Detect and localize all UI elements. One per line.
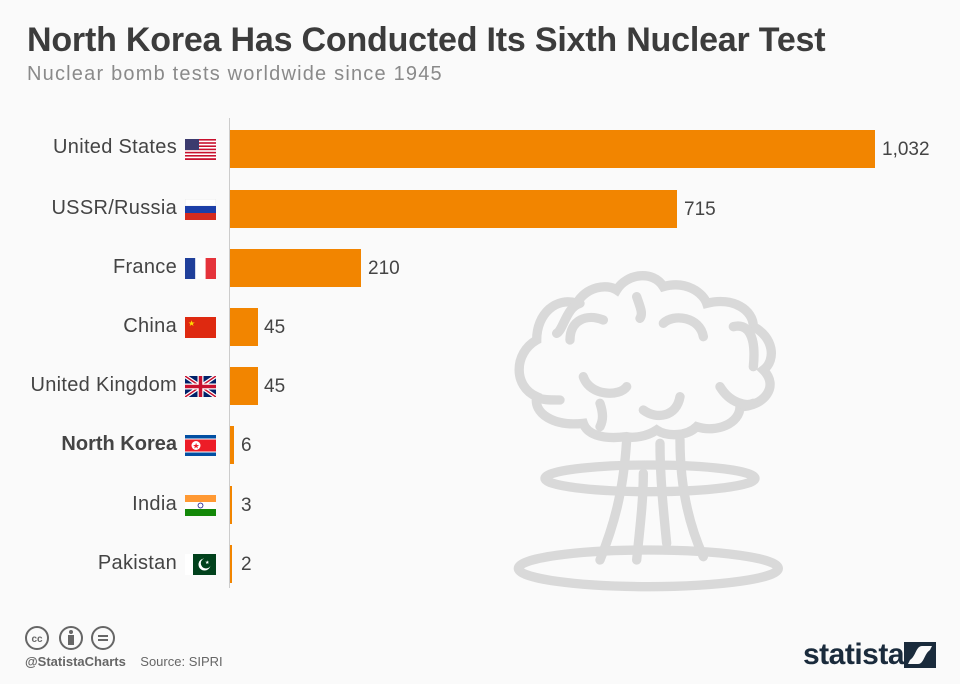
row: India [132, 486, 252, 524]
title: North Korea Has Conducted Its Sixth Nuclear Test [27, 21, 825, 59]
footer: license icons: cc [31, 634, 43, 645]
text: North Korea [61, 433, 177, 455]
text: 45 [264, 376, 285, 397]
row: USSR/Russia [51, 190, 716, 228]
text: United Kingdom [30, 374, 177, 396]
text: China [123, 315, 177, 337]
logo mark [904, 642, 936, 668]
axis line [229, 118, 230, 588]
text: France [113, 256, 177, 278]
text: 210 [368, 258, 400, 279]
row: Pakistan [98, 545, 252, 583]
row: North Korea [61, 426, 252, 464]
footer: credits: @StatistaCharts Source: SIPRI [25, 654, 223, 669]
icon: mushroom cloud [514, 271, 783, 592]
text: ★ [188, 319, 195, 328]
text: Pakistan [98, 552, 177, 574]
logo: statista: statista [803, 638, 904, 671]
text: ★ [205, 560, 210, 566]
row: France [113, 249, 400, 287]
text: 3 [241, 495, 252, 516]
text: 715 [684, 199, 716, 220]
text: ★ [192, 442, 200, 450]
row: China [123, 308, 285, 346]
text: India [132, 493, 177, 515]
subtitle: Nuclear bomb tests worldwide since 1945 [27, 63, 443, 85]
text: 2 [241, 554, 252, 575]
footer: license icons [25, 626, 115, 650]
row: United Kingdom [30, 367, 285, 405]
row: United States [53, 130, 930, 168]
text: United States [53, 136, 177, 158]
text: 1,032 [882, 139, 930, 160]
text: 45 [264, 317, 285, 338]
text: 6 [241, 435, 252, 456]
text: USSR/Russia [51, 197, 177, 219]
